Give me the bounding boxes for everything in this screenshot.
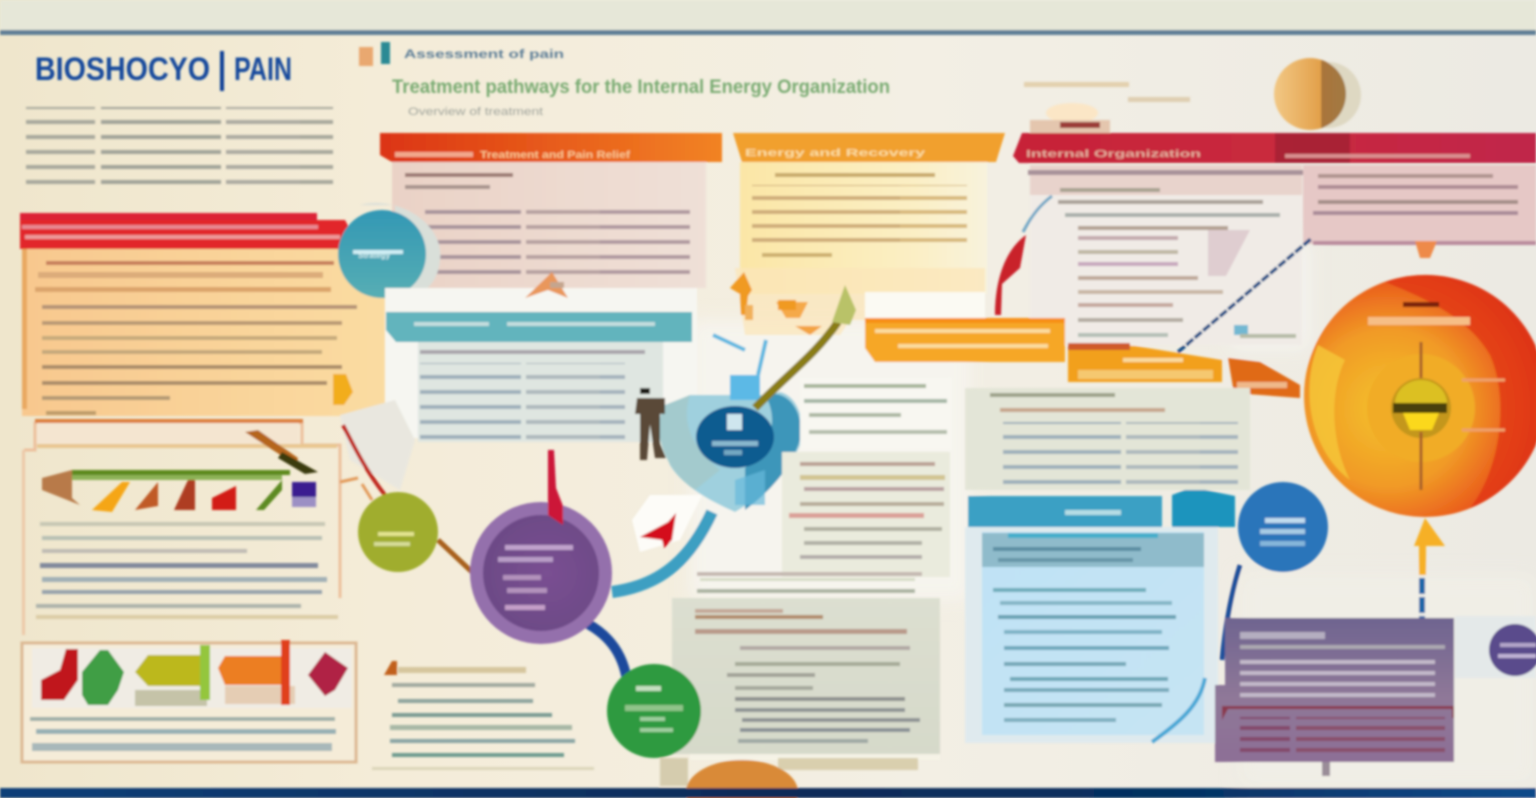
circle: olive xyxy=(358,492,438,572)
panel: red heading right: Internal Organization xyxy=(1026,149,1201,160)
connector: light blue curve xyxy=(612,512,712,592)
panel: blue header xyxy=(965,490,1235,743)
subtitle: Treatment pathways for the Internal Energy Organization xyxy=(392,77,890,98)
icon: dark blue badge xyxy=(696,406,774,468)
arrow: brown leaf xyxy=(245,430,318,474)
connector: brown xyxy=(438,540,472,572)
arrow: red xyxy=(640,513,676,548)
icon: person xyxy=(635,388,666,460)
soft white glow areas xyxy=(690,240,1536,785)
panel: purple xyxy=(1215,618,1454,776)
shape: bottom orange semicircle xyxy=(686,760,798,798)
panel: orange heading: Energy and Recovery xyxy=(745,148,926,159)
title: PAIN xyxy=(234,51,292,87)
illustration: top note xyxy=(1024,82,1190,133)
panel: red heading right xyxy=(1013,133,1536,163)
arrow: red curved xyxy=(995,235,1026,315)
banner: red orange tab xyxy=(1228,358,1300,398)
circle: teal xyxy=(338,203,440,300)
top small caption: Assessment of pain xyxy=(404,47,564,61)
icon: orange flag xyxy=(333,374,353,405)
text block: mid top xyxy=(800,378,952,450)
icon: small arrow on card xyxy=(525,272,568,298)
panel: orange left xyxy=(22,249,390,416)
arrow: red spike xyxy=(548,450,563,525)
bottom band xyxy=(0,788,1536,798)
title: BIOSHOCYO xyxy=(35,51,210,87)
arrow: orange below dial xyxy=(1414,518,1445,620)
panel: red orange heading: Treatment and Pain Relief xyxy=(480,150,631,161)
circle: small purple xyxy=(1489,624,1536,676)
chart: sun dial circle xyxy=(1304,275,1536,517)
top band xyxy=(0,0,1536,35)
connector: blue curve xyxy=(1222,565,1240,660)
panel: right text under red heading xyxy=(1028,165,1303,345)
title xyxy=(35,51,292,91)
arrow: orange above dial xyxy=(1415,241,1437,258)
intro text block xyxy=(26,107,333,185)
panel: orange heading xyxy=(733,133,1005,294)
decor lines: blue xyxy=(713,335,770,375)
connector: orange xyxy=(340,478,372,500)
icons row xyxy=(41,640,348,706)
subtitle: Overview of treatment xyxy=(408,106,543,118)
subtitle xyxy=(392,77,890,118)
icon: small blue star xyxy=(1234,325,1296,338)
white patch under yellow panel xyxy=(865,292,985,318)
panel: grey centre xyxy=(672,598,940,760)
panel: red orange heading xyxy=(380,133,722,288)
strips beside bottom semicircle xyxy=(660,758,918,786)
circle: teal: Strategy xyxy=(358,251,391,260)
white patch behind red arrow xyxy=(632,495,702,552)
connector: light blue lower xyxy=(1152,678,1205,742)
circle: purple xyxy=(470,502,612,644)
glow: spark zone xyxy=(735,268,985,335)
connector: navy curve xyxy=(588,624,627,680)
circle: blue xyxy=(1238,482,1328,572)
panel: bottom left icons xyxy=(22,643,356,762)
arrows: orange sparks xyxy=(730,272,822,335)
connector: dotted blue xyxy=(1023,196,1052,232)
panel: left outlined arrows xyxy=(22,419,340,635)
top small caption xyxy=(359,42,564,66)
text block: mid low xyxy=(782,452,950,577)
panel: grey text upper right xyxy=(965,388,1250,490)
text block: bottom middle xyxy=(372,661,594,770)
arrow row xyxy=(42,470,316,512)
red header left xyxy=(20,213,352,249)
text block: mid lower wide xyxy=(697,572,922,593)
panel: pale behind small purple xyxy=(1455,616,1536,678)
banner: orange step xyxy=(1068,343,1222,382)
pale patch near person xyxy=(340,400,415,490)
circle: green xyxy=(607,664,701,758)
banner: orange middle xyxy=(865,318,1065,362)
blue heart xyxy=(659,375,803,512)
panel: right pink xyxy=(1303,165,1536,245)
arrow: olive plant xyxy=(755,285,856,408)
icon: golden sphere xyxy=(1274,58,1361,130)
arrow: diagonal navy xyxy=(1178,238,1312,352)
panel: light blue xyxy=(982,532,1204,735)
connector: red xyxy=(343,425,385,495)
panel: teal card xyxy=(385,288,697,447)
